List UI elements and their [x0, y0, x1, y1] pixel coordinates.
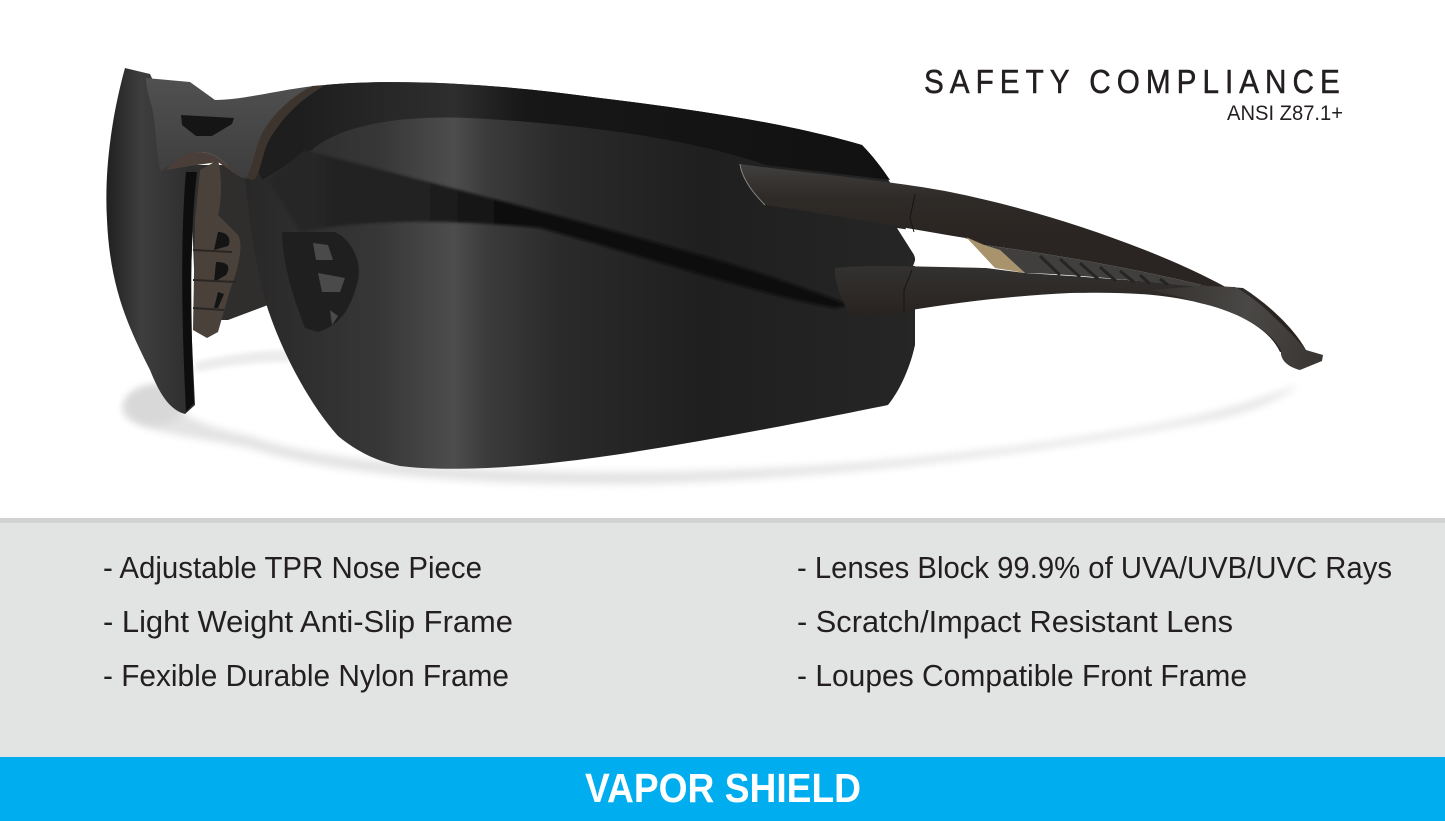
product image: safety glasses: [106, 68, 1323, 484]
title: VAPOR SHIELD: [585, 765, 861, 811]
heading text: SAFETY COMPLIANCE: [924, 64, 1340, 100]
ground shadow: [123, 350, 1300, 484]
temple tip: [1150, 286, 1323, 370]
title bar: [0, 757, 1445, 821]
reflected nose pad in lens: [282, 232, 359, 332]
rear frame behind nose: [190, 165, 268, 320]
feature list right: - Scratch/Impact Resistant Lens: [797, 604, 1233, 639]
upper temple arm: [740, 164, 1275, 318]
feature list left: - Fexible Durable Nylon Frame: [103, 658, 509, 693]
feature list right: - Lenses Block 99.9% of UVA/UVB/UVC Rays: [797, 550, 1392, 585]
upper temple arm outline: [740, 164, 765, 205]
nose pad: [193, 160, 240, 338]
panel divider: [0, 518, 1445, 523]
feature list left: [103, 550, 513, 693]
lower temple arm: [835, 266, 1306, 352]
bridge: [146, 78, 325, 180]
safety compliance heading: [924, 64, 1343, 125]
standard text: ANSI Z87.1+: [1227, 102, 1343, 125]
temple grip texture: [984, 245, 1202, 287]
feature list right: - Loupes Compatible Front Frame: [797, 658, 1247, 693]
feature list left: - Light Weight Anti-Slip Frame: [103, 604, 513, 639]
left lens inner edge: [182, 172, 197, 412]
left lens: [106, 68, 195, 414]
feature list right: [797, 550, 1392, 693]
feature list left: - Adjustable TPR Nose Piece: [103, 550, 482, 585]
lens reflected temple band: [268, 150, 850, 308]
temple opening: [897, 228, 990, 268]
lens top dark band: [250, 82, 890, 180]
main lens: [245, 82, 915, 469]
gold accent: [966, 237, 1025, 273]
temple hinge line: [904, 194, 915, 312]
panel: features: [0, 523, 1445, 757]
